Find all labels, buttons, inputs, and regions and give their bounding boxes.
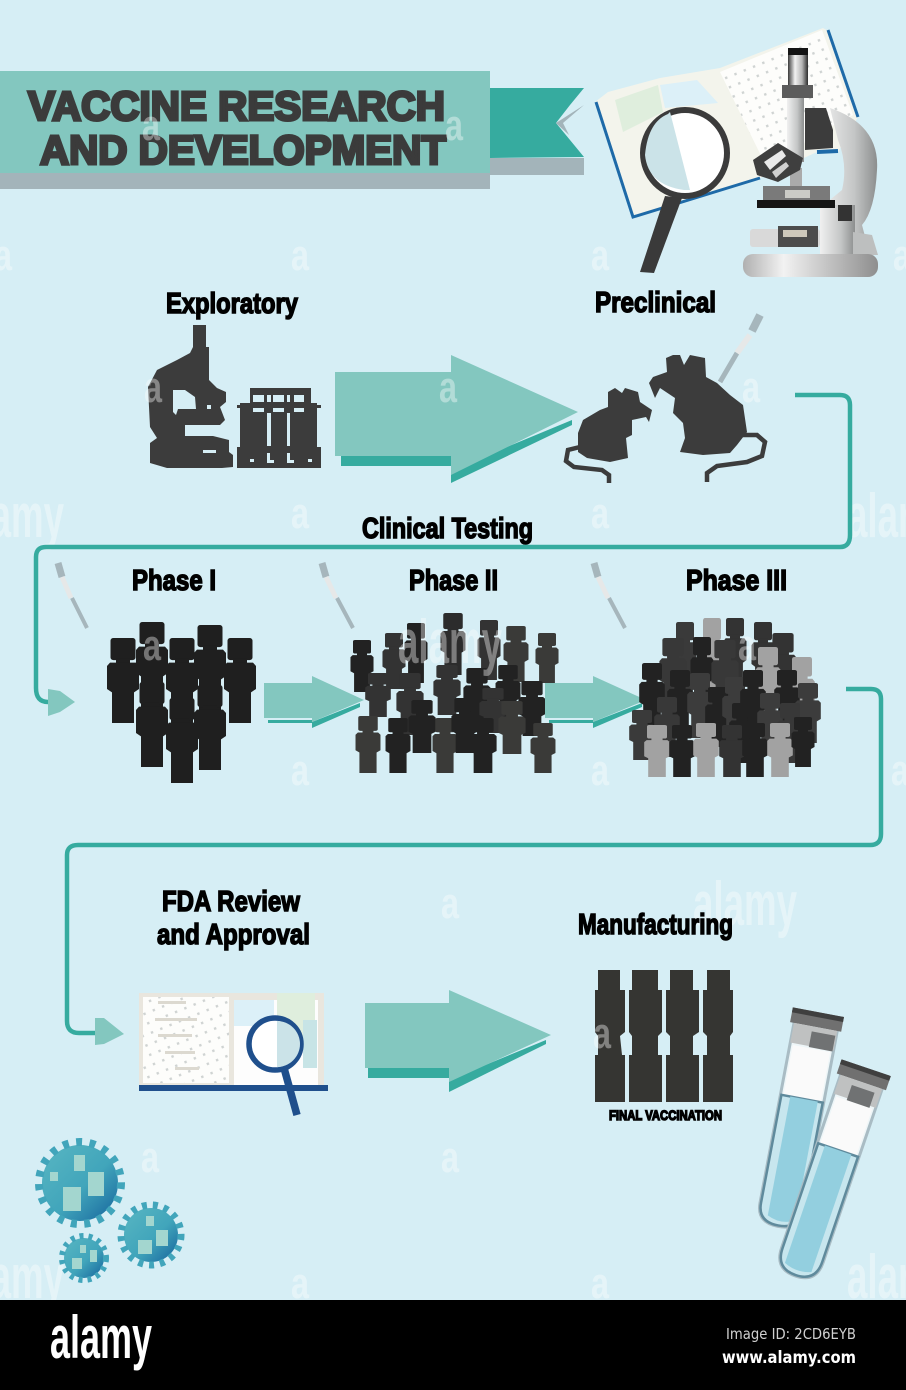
watermarks: a [591,489,609,538]
watermarks: a [291,231,309,280]
watermarks over artwork: a [593,1009,611,1058]
footer logo: alamy [50,1304,152,1371]
arrow: FDA review to manufacturing [365,990,551,1092]
icon: virus small [62,1236,106,1280]
watermarks over artwork: a [142,101,160,150]
icon: open book with blue magnifier [139,993,328,1115]
heading: Phase II: Phase II [409,565,498,597]
watermarks: alamy [693,870,797,939]
title [28,83,446,173]
watermarks over artwork: a [445,101,463,150]
heading: Phase III: Phase III [686,565,787,597]
icon: microscope silhouette [148,325,233,468]
heading: FDA Review and Approval: FDA Review [162,886,300,918]
watermarks over artwork: a [439,363,457,412]
icon: phase II crowd [350,613,559,773]
heading: FDA Review and Approval [157,886,310,951]
watermarks over artwork: a [144,363,162,412]
icon: test tube back [752,1007,844,1231]
icon: syringe over mice [720,315,760,382]
heading: Clinical Testing: Clinical Testing [362,513,533,545]
icon: book with magnifier and microscope [595,28,878,277]
footer band [0,1300,906,1390]
watermarks: a [291,489,309,538]
icon: phase III crowd [629,618,821,777]
caption: under vials: FINAL VACCINATION [609,1107,722,1123]
icon: virus large [39,1142,121,1224]
icon: small mouse [578,388,652,462]
footer url: www.alamy.com [722,1348,856,1368]
watermarks over artwork: a [143,621,161,670]
icon: syringe phase I [58,563,87,628]
icon: virus medium [121,1205,181,1265]
watermarks: a [291,746,309,795]
banner body [0,71,490,189]
watermarks over artwork: a [742,363,760,412]
arrow: phase I to phase II [264,676,364,728]
watermarks [0,231,906,1312]
title: VACCINE RESEARCH [28,83,445,129]
icon: blue magnifying glass [249,1018,301,1115]
icon: test tube rack silhouette [237,388,321,468]
icon: large mouse [649,355,747,455]
heading: Exploratory: Exploratory [166,288,298,320]
connector: preclinical to clinical testing [36,395,850,702]
watermarks: a [441,1133,459,1182]
icon: phase I crowd [107,622,256,783]
icon: open book [595,28,858,217]
icon: mice [566,355,765,483]
arrow: exploratory to preclinical [335,355,578,483]
footer image id: Image ID: 2CD6EYB [726,1325,856,1343]
panel: title banner [0,71,584,189]
arrow head: into phase I [48,689,75,716]
banner ribbon tail [490,88,584,175]
icon: vaccine vials silhouette [595,970,733,1102]
heading: Manufacturing: Manufacturing [578,909,733,941]
icon: test tube front [771,1059,891,1284]
watermarks over artwork [142,101,760,1058]
watermarks over artwork: a [738,621,756,670]
icon: microscope [743,48,878,277]
arrow: phase II to phase III [545,676,646,728]
watermarks over artwork: alamy [398,608,502,677]
watermarks: a [441,879,459,928]
heading: Phase I: Phase I [132,565,216,597]
heading: Preclinical: Preclinical [595,287,716,319]
watermarks: a [591,746,609,795]
icon: syringe phase III [594,563,625,628]
connector: clinical testing to FDA review [67,689,881,1033]
title: AND DEVELOPMENT [40,127,446,173]
heading: FDA Review and Approval: and Approval [157,919,310,951]
arrow head: into FDA review [95,1018,124,1045]
watermarks: a [141,1133,159,1182]
watermarks: a [291,1259,309,1308]
icon: magnifying glass [640,110,727,273]
icon: syringe phase II [322,563,353,628]
watermarks: a [591,231,609,280]
watermarks: a [591,1259,609,1308]
